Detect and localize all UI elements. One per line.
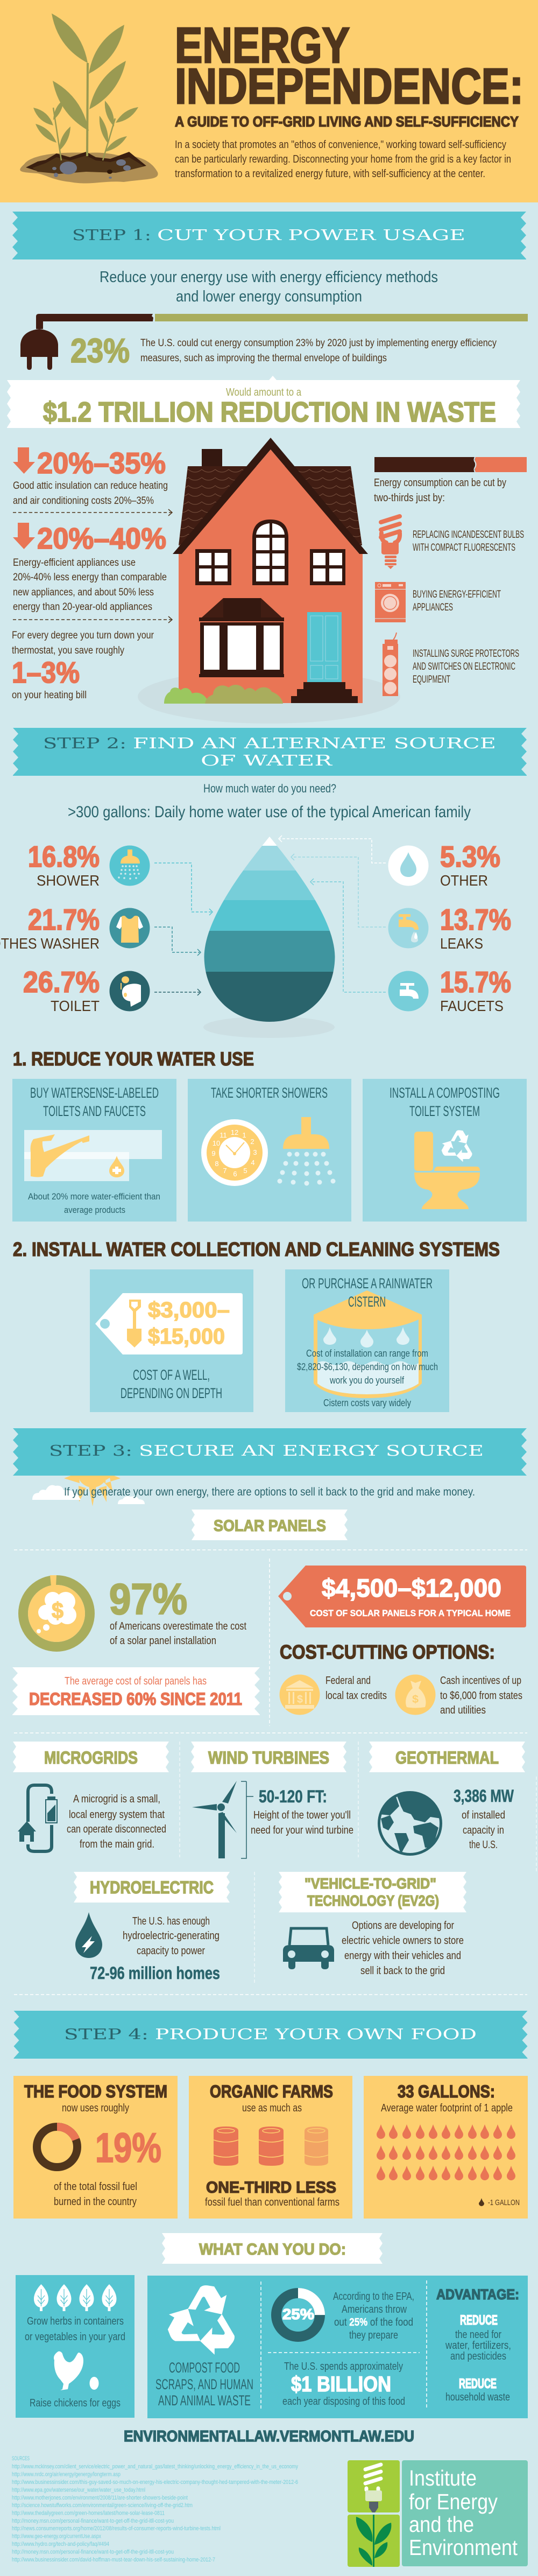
sources list: [12, 2455, 298, 2563]
icon: toilet: [414, 1132, 480, 1209]
icon: shower head: [110, 845, 150, 886]
stat block: efficient appliances: Energy-efficient appliances use: [13, 557, 136, 568]
icon: clock: 11: [220, 1131, 227, 1139]
stat: faucets 15.7%: FAUCETS: [440, 998, 504, 1014]
icon: toilet paper: [110, 971, 150, 1011]
panel: wind turbines: [191, 1742, 353, 1858]
price tag: solar cost: [278, 1566, 526, 1627]
stat: shower 16.8%: [28, 840, 150, 889]
icon: drop in white circle: [388, 845, 428, 886]
callout: $1.2 trillion ribbon: [7, 376, 520, 428]
connector: toilet: [154, 989, 201, 995]
step 1 intro heading: Reduce your energy use with energy efficiency methods: [100, 269, 438, 286]
text: tax credits: local tax credits: [325, 1690, 387, 1702]
panel: organic farms: ORGANIC FARMS: [210, 2082, 333, 2101]
stat: shower 16.8%: SHOWER: [37, 872, 100, 889]
stat: leaks 13.7%: LEAKS: [440, 935, 483, 952]
text: cash incentives: [440, 1675, 522, 1716]
logo: Institute for Energy and the Environment: Environment: [409, 2535, 518, 2560]
text: compost: [155, 2360, 253, 2409]
icon: clock: 7: [223, 1167, 227, 1175]
text: overestimate: [110, 1620, 246, 1647]
panel: vehicle-to-grid: Options are developing for: [352, 1920, 454, 1932]
stat block: thermostat: 1–3%: [12, 656, 80, 689]
icon: wind turbine: [192, 1781, 237, 1858]
stat: 23%: 23%: [70, 332, 130, 370]
step 2 banner: [13, 728, 527, 776]
icon: recycle symbol large: [160, 2285, 242, 2360]
panel: 33 gallons: [364, 2076, 528, 2219]
step 1 intro heading: [100, 269, 438, 305]
illustration: cistern: [314, 1290, 422, 1398]
ribbon: decreased 60%: The average cost of solar panels has: [65, 1675, 207, 1687]
panel: geothermal: capacity in: [463, 1824, 504, 1836]
panel: cost of a well: $3,000–: [148, 1297, 230, 1322]
sources list: http://www.motherjones.com/environment/2008/11/are-shorter-showers-beside-point: [12, 2495, 188, 2501]
panel: hydroelectric: [74, 1872, 230, 1983]
stat block: efficient appliances: energy than 20-year-old appliances: [13, 601, 152, 613]
icon: bank: $: [297, 1694, 303, 1705]
website url: ENVIRONMENTALLAW.VERMONTLAW.EDU: [124, 2428, 414, 2445]
stat block: efficient appliances: [13, 522, 172, 623]
text: compost: COMPOST FOOD: [169, 2360, 240, 2376]
panel: microgrids: local energy system that: [69, 1809, 165, 1821]
step 2 banner: FIND AN ALTERNATE SOURCE: [133, 735, 496, 752]
icon: shirt: [110, 908, 150, 949]
panel: hydroelectric: capacity to power: [137, 1945, 205, 1957]
text: tax credits: Federal and: [325, 1675, 371, 1687]
sources list: http://news.consumerreports.org/home/2012/08/results-of-consumer-reports-wind-turbine-tests.html: [12, 2525, 221, 2532]
stat: toilet 26.7%: [23, 965, 150, 1014]
heading: reduce your water use: 1. REDUCE YOUR WATER USE: [13, 1049, 254, 1070]
stat: faucets 15.7%: 15.7%: [440, 965, 511, 999]
panel: hydroelectric: HYDROELECTRIC: [90, 1878, 214, 1897]
logo: Institute for Energy and the Environment: for Energy: [409, 2489, 498, 2514]
icon: clock: [201, 1119, 268, 1186]
panel: vehicle-to-grid: TECHNOLOGY (EV2G): [307, 1892, 439, 1909]
text: buy efficient appliances: APPLIANCES: [413, 602, 453, 613]
panel: take shorter showers: TAKE SHORTER SHOWERS: [211, 1085, 328, 1101]
text: EPA food waste: they prepare: [349, 2329, 398, 2341]
panel: vehicle-to-grid: electric vehicle owners to store: [342, 1935, 464, 1947]
text: advantage: REDUCE: [459, 2376, 497, 2391]
legend: one gallon: -1 GALLON: [488, 2198, 520, 2207]
text: advantage: household waste: [445, 2391, 510, 2403]
panel: rainwater cistern: OR PURCHASE A RAINWATER: [302, 1275, 433, 1291]
step 1 banner: CUT YOUR POWER USAGE: [157, 227, 465, 244]
panel: 33 gallons: 33 GALLONS:: [398, 2082, 495, 2101]
front steps: [291, 682, 358, 703]
stat block: efficient appliances: 20%–40%: [37, 522, 166, 555]
sources list: http://www.businessinsider.com/this-guy-saved-so-much-on-energy-his-electric-company-thought-hed-tampered-with-the-meter-2012-6: [12, 2479, 298, 2486]
step 4 banner: PRODUCE YOUR OWN FOOD: [155, 2026, 477, 2043]
connector: faucets: [310, 879, 386, 992]
text: buy efficient appliances: [413, 589, 501, 613]
panel: microgrids: from the main grid.: [80, 1838, 154, 1850]
icon: money bag: $: [412, 1694, 419, 1705]
illustration: plant growing from soil: [20, 13, 158, 184]
stat: other 5.3%: 5.3%: [440, 840, 500, 873]
connector: shower: [154, 863, 213, 915]
bushes: [164, 685, 283, 704]
icon: clock: 1: [242, 1131, 246, 1139]
stat: $1 billion: [282, 2361, 405, 2407]
icon: microgrid loop with battery and house: [18, 1785, 57, 1851]
icon: globe: [379, 1790, 442, 1855]
callout: $1.2 trillion ribbon: $1.2 TRILLION REDUCTION IN WASTE: [43, 397, 496, 428]
panel: microgrids: [13, 1742, 169, 1851]
panel: wind turbines: need for your wind turbine: [251, 1824, 353, 1836]
stat block: attic insulation: and air conditioning costs 20%–35%: [13, 495, 154, 507]
icon: clock: 6: [233, 1170, 237, 1178]
panel: organic farms: [189, 2076, 352, 2219]
panel: wind turbines: 50-120 FT:: [259, 1787, 327, 1806]
text: advantage: [436, 2286, 519, 2403]
icon: herb leaves: [34, 2284, 116, 2311]
stat block: efficient appliances: new appliances, and about 50% less: [13, 587, 154, 598]
panel: vehicle-to-grid: "VEHICLE-TO-GRID": [305, 1875, 436, 1892]
icon: chicken and egg: [54, 2352, 99, 2390]
icon: shower: [278, 1117, 336, 1185]
price tag: [95, 1293, 243, 1354]
connector: leaks: [291, 854, 386, 927]
chart: water drop stacked by use: [199, 834, 339, 1038]
legend: one gallon: [479, 2198, 520, 2207]
stat: leaks 13.7%: [388, 903, 511, 952]
text: tax credits: [325, 1675, 387, 1702]
panel: geothermal: 3,386 MW: [454, 1786, 514, 1806]
ribbon: what can you do: WHAT CAN YOU DO:: [199, 2241, 346, 2258]
icon: clock: 10: [213, 1139, 220, 1147]
text: surge protectors: [413, 648, 519, 685]
stat block: attic insulation: Good attic insulation can reduce heating: [13, 480, 168, 492]
panel: microgrids: MICROGRIDS: [44, 1748, 138, 1767]
step 2 banner: OF WATER: [201, 753, 332, 769]
panel: cost of a well: DEPENDING ON DEPTH: [121, 1385, 222, 1401]
connector: clothes washer: [154, 927, 201, 956]
step 4 banner: STEP 4:: [64, 2026, 148, 2043]
title: ENERGY: [175, 17, 350, 73]
panel: hydroelectric: The U.S. has enough: [132, 1915, 210, 1927]
step 1 banner: STEP 1:: [72, 227, 151, 244]
text: surge protectors: EQUIPMENT: [413, 674, 450, 685]
connector: other: [279, 836, 386, 863]
panel: the food system: burned in the country: [54, 2196, 137, 2208]
sources list: http://www.mckinsey.com/client_service/electric_power_and_natural_gas/latest_thinking/unlocking_energy_efficiency_in_the_us_economy: [12, 2463, 298, 2470]
intro paragraph: [175, 139, 511, 180]
panel: organic farms: fossil fuel than conventional farms: [205, 2196, 339, 2208]
ribbon: decreased 60%: [12, 1667, 260, 1715]
chart: 97% ring: [23, 1575, 90, 1647]
sources list: http://science.howstuffworks.com/environmental/green-science/living-off-the-grid2.htm: [12, 2502, 193, 2509]
ribbon: solar panels: SOLAR PANELS: [214, 1517, 326, 1535]
icon: clock: 9: [211, 1149, 216, 1157]
panel: rainwater cistern: $2,820-$6,130, depending on how much: [297, 1361, 438, 1372]
panel: the food system: THE FOOD SYSTEM: [24, 2082, 167, 2101]
stat: $1 billion: each year disposing of this food: [282, 2396, 405, 2407]
icon: drop with plus: [109, 1156, 124, 1177]
text: advantage: and pesticides: [450, 2350, 506, 2362]
panel: the food system: of the total fossil fuel: [54, 2181, 137, 2193]
right window: [310, 549, 345, 585]
left window: [195, 549, 231, 585]
text: two-thirds heading: [374, 477, 506, 504]
panel: rainwater cistern: work you do yourself: [329, 1375, 405, 1386]
icon: fuel barrels: [214, 2126, 328, 2166]
panel: microgrids: can operate disconnected: [67, 1823, 166, 1835]
text: advantage: REDUCE: [460, 2313, 498, 2328]
panel: the food system: now uses roughly: [62, 2102, 129, 2114]
panel: hydroelectric: 72-96 million homes: [90, 1963, 220, 1983]
title: [175, 17, 523, 114]
heading: cost-cutting options: COST-CUTTING OPTIONS:: [280, 1641, 495, 1663]
panel: cost of a well: $15,000: [148, 1324, 225, 1349]
panel: compost and waste: [147, 2276, 528, 2418]
icon: drop with lightning: [75, 1912, 102, 1958]
icon: thought cloud with dollar: $: [52, 1598, 63, 1623]
icon: money bag: [395, 1674, 436, 1715]
logo: Institute for Energy and the Environment: and the: [409, 2512, 474, 2537]
panel: vehicle-to-grid: [279, 1872, 466, 1977]
panel: take shorter showers: [188, 1079, 351, 1222]
icon: clock: 4: [251, 1159, 255, 1167]
water usage headline: >300 gallons: Daily home water use of the typical American family: [68, 803, 471, 821]
icon: sun behind banner: [64, 1457, 121, 1506]
panel: watersense toilets and faucets: About 20% more water-efficient than: [28, 1191, 160, 1202]
height bracket: [241, 1781, 253, 1858]
icon: leaking tap: [388, 908, 428, 949]
header panel: [0, 0, 538, 202]
panel: watersense toilets and faucets: [12, 1079, 176, 1222]
logo: Institute for Energy and the Environment: Institute: [409, 2466, 477, 2490]
panel: rainwater cistern: [285, 1269, 449, 1412]
panel: geothermal: [369, 1742, 525, 1855]
step 1 banner: [12, 212, 526, 259]
stat block: thermostat: on your heating bill: [12, 690, 87, 701]
sources list: http://money.msn.com/personal-finance/want-to-get-off-the-grid-itll-cost-you: [12, 2549, 174, 2555]
stat: other 5.3%: [388, 840, 500, 889]
sources list: http://www.nrdc.org/air/energy/genergy/longterm.asp: [12, 2471, 121, 2477]
sources list: http://money.msn.com/personal-finance/want-to-get-off-the-grid-itll-cost-you: [12, 2518, 174, 2524]
panel: geothermal: the U.S.: [469, 1839, 498, 1851]
panel: geothermal: of installed: [462, 1809, 505, 1821]
stat: leaks 13.7%: 13.7%: [440, 903, 511, 936]
icon: clock: 2: [250, 1138, 254, 1146]
stat: shower 16.8%: 16.8%: [28, 840, 100, 873]
text: compost: SCRAPS, AND HUMAN: [155, 2376, 253, 2392]
text: EPA food waste: out 25% of the food: [334, 2317, 413, 2328]
icon: car: [283, 1928, 334, 1969]
panel: the food system: [13, 2076, 178, 2219]
text: 23% explanation: measures, such as improving the thermal envelope of buildings: [140, 353, 387, 364]
sources list: http://www.businessinsider.com/david-hoffman-must-tear-down-his-self-sustaining-home-2012-7: [12, 2557, 215, 2563]
panel: the food system: 19%: [95, 2125, 161, 2171]
sources list: http://www.hydro.org/tech-and-policy/faq/#494: [12, 2541, 109, 2547]
panel: cost of a well: [90, 1269, 253, 1412]
panel: organic farms: use as much as: [242, 2102, 302, 2114]
step 2 banner: STEP 2:: [43, 735, 126, 752]
chart: 33 gallon drops: [377, 2124, 515, 2180]
panel: organic farms: ONE-THIRD LESS: [206, 2179, 336, 2196]
stat: other 5.3%: OTHER: [440, 872, 488, 889]
panel: wind turbines: Height of the tower you'll: [253, 1809, 351, 1821]
stat block: attic insulation: [13, 446, 172, 516]
stat: toilet 26.7%: 26.7%: [23, 965, 100, 999]
water question: How much water do you need?: [203, 782, 336, 795]
panel: wind turbines: WIND TURBINES: [208, 1748, 329, 1767]
panel: rainwater cistern: Cistern costs vary widely: [323, 1398, 411, 1408]
logo icon: leaves: [356, 2515, 391, 2567]
text: advantage: the need for: [455, 2329, 501, 2341]
icon: compact fluorescent bulb: [381, 516, 400, 569]
stat: $1 billion: The U.S. spends approximately: [284, 2361, 403, 2373]
icon: washing machine: [375, 582, 406, 622]
sources list: http://www.thedailygreen.com/green-homes/latest/home-solar-lease-0811: [12, 2510, 165, 2516]
panel: vehicle-to-grid: sell it back to the grid: [360, 1965, 445, 1977]
panel: herbs and chickens: or vegetables in your yard: [25, 2331, 125, 2343]
ribbon: what can you do: [162, 2233, 383, 2264]
text: EPA food waste: Americans throw: [342, 2304, 407, 2315]
stat block: thermostat: thermostat, you save roughly: [12, 645, 124, 656]
panel: geothermal: GEOTHERMAL: [395, 1748, 499, 1767]
text: EPA food waste: According to the EPA,: [333, 2291, 414, 2303]
text: compost: AND ANIMAL WASTE: [158, 2392, 251, 2409]
panel: watersense toilets and faucets: TOILETS AND FAUCETS: [43, 1103, 146, 1119]
sources list: http://www.epa.gov/watersense/our_water/water_use_today.html: [12, 2487, 145, 2494]
text: advantage: ADVANTAGE:: [436, 2286, 519, 2303]
text: advantage: water, fertilizers,: [445, 2340, 511, 2352]
front door: [307, 612, 342, 682]
text: cash incentives: and utilities: [440, 1704, 486, 1716]
panel: herbs and chickens: [16, 2275, 134, 2418]
text: two-thirds heading: two-thirds just by:: [374, 492, 445, 504]
intro paragraph: transformation to a revitalized energy future, with self-sufficiency at the center.: [175, 168, 485, 180]
panel: watersense toilets and faucets: average products: [64, 1205, 125, 1215]
chart: 19% donut: [37, 2126, 77, 2167]
stat block: thermostat: [12, 630, 154, 701]
icon: clock: 12: [231, 1128, 238, 1136]
step 3 banner: [13, 1428, 527, 1476]
step 3 banner: SECURE AN ENERGY SOURCE: [139, 1443, 484, 1459]
icon: recycle symbol small: [438, 1130, 476, 1164]
ribbon: solar panels: [192, 1510, 348, 1540]
panel: hydroelectric: hydroelectric-generating: [123, 1930, 220, 1942]
bay window with awning: [199, 598, 284, 677]
bar: two-thirds energy cut: [374, 457, 527, 472]
icon: clock: 8: [215, 1160, 219, 1168]
icon: clock: 5: [243, 1167, 247, 1175]
icon: shovel: [127, 1300, 141, 1347]
stat: clothes washer 21.7%: 21.7%: [28, 903, 100, 936]
logo: Institute for Energy and the Environment: [348, 2460, 528, 2567]
icon: surge protector: [383, 633, 398, 696]
stat: clothes washer 21.7%: [0, 903, 150, 952]
panel: rainwater cistern: CISTERN: [348, 1294, 386, 1310]
stat block: efficient appliances: 20%-40% less energy than comparable: [13, 572, 167, 583]
sources list: SOURCES: [12, 2455, 30, 2462]
icon: bank: [280, 1674, 320, 1715]
panel: rainwater cistern: Cost of installation can range from: [306, 1348, 428, 1359]
panel: 33 gallons: Average water footprint of 1 apple: [381, 2102, 513, 2114]
text: two-thirds heading: Energy consumption can be cut by: [374, 477, 506, 489]
text: overestimate: of Americans overestimate the cost: [110, 1620, 246, 1632]
center arched window: [252, 520, 288, 585]
chart: 25% donut: 25%: [282, 2306, 314, 2322]
chart: 25% donut: [277, 2293, 320, 2336]
price tag: solar cost: $4,500–$12,000: [322, 1574, 501, 1602]
icon: clouds: [32, 1485, 145, 1504]
logo icon: bulb: [365, 2465, 382, 2512]
panel: vehicle-to-grid: energy with their vehicles and: [344, 1950, 461, 1962]
text: replace bulbs: [413, 529, 524, 553]
ribbon: decreased 60%: DECREASED 60% SINCE 2011: [29, 1689, 242, 1709]
stat block: thermostat: For every degree you turn down your: [12, 630, 154, 641]
stat: faucets 15.7%: [388, 965, 511, 1014]
step 1 intro heading: and lower energy consumption: [176, 288, 362, 305]
stat block: attic insulation: 20%–35%: [37, 446, 166, 480]
icon: faucet: [388, 971, 428, 1011]
panel: composting toilet: [363, 1079, 527, 1222]
panel: herbs and chickens: Grow herbs in containers: [27, 2315, 124, 2327]
panel: herbs and chickens: Raise chickens for eggs: [30, 2397, 121, 2409]
icon: clock: 3: [253, 1148, 257, 1156]
step 3 banner: STEP 3:: [49, 1443, 132, 1459]
stat: toilet 26.7%: TOILET: [51, 998, 100, 1014]
illustration: house: [138, 438, 400, 724]
text: sell energy back: If you generate your own energy, there are options to sell it back to the grid and make money.: [64, 1486, 475, 1498]
step 4 banner: [14, 2011, 527, 2059]
text: EPA food waste: [333, 2291, 414, 2341]
callout: $1.2 trillion ribbon: Would amount to a: [226, 387, 302, 398]
text: overestimate: of a solar panel installation: [110, 1635, 216, 1647]
price tag: solar cost: COST OF SOLAR PANELS FOR A TYPICAL HOME: [310, 1608, 511, 1618]
panel: cost of a well: COST OF A WELL,: [133, 1367, 210, 1383]
icon: power plug with cord: [20, 314, 528, 370]
sources list: http://www.geo-energy.org/currentUse.aspx: [12, 2533, 101, 2540]
icon: kitchen faucet: [31, 1134, 89, 1177]
stat: $1 billion: $1 BILLION: [291, 2373, 391, 2396]
text: 23% explanation: [140, 338, 497, 364]
panel: composting toilet: TOILET SYSTEM: [409, 1103, 480, 1119]
panel: watersense toilets and faucets: BUY WATERSENSE-LABELED: [30, 1085, 159, 1101]
stat: 97%: 97%: [109, 1575, 187, 1624]
panel: microgrids: A microgrid is a small,: [73, 1793, 160, 1805]
